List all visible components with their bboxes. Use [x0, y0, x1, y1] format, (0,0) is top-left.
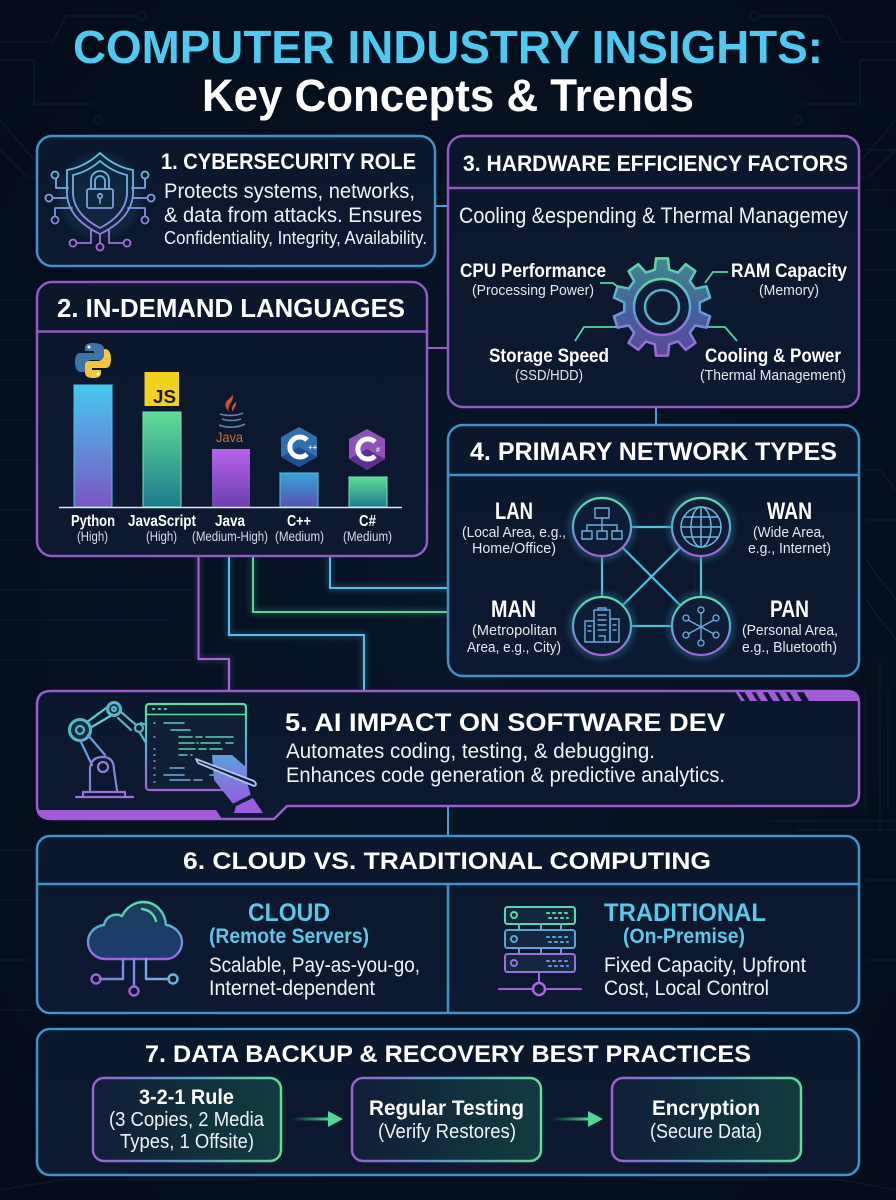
title [73, 21, 823, 121]
icon: python logo [75, 343, 111, 378]
step: encryption [612, 1078, 801, 1161]
traditional text: (On-Premise) [623, 925, 745, 948]
bar labels: (High) [77, 528, 108, 544]
title: Key Concepts & Trends [202, 70, 694, 121]
icon: cloud [88, 902, 182, 996]
label: lan [462, 498, 566, 557]
icon: java logo: Java [216, 429, 243, 445]
bar: Java [212, 449, 250, 507]
bar chart [59, 385, 402, 508]
accent: top-right stripes [735, 691, 859, 701]
icon: lan [568, 493, 636, 561]
icon: javascript logo [144, 372, 179, 407]
panel: 4. primary network types [448, 425, 859, 676]
bar: JavaScript [143, 412, 181, 507]
bar labels: Java [215, 513, 245, 530]
factor: ram capacity: RAM Capacity [731, 261, 847, 282]
description: Automates coding, testing, & debugging. [286, 740, 655, 763]
cloud text: (Remote Servers) [209, 925, 369, 948]
bar: C# [349, 477, 387, 507]
step: regular testing: Regular Testing [369, 1097, 524, 1120]
network diagram links [602, 527, 701, 626]
icon: java logo [216, 394, 245, 445]
label: pan [742, 596, 838, 656]
step: encryption: Encryption [652, 1097, 760, 1120]
heading: 2. IN-DEMAND LANGUAGES [57, 293, 405, 323]
icon: man buildings [568, 592, 636, 660]
factor: cpu performance: CPU Performance [460, 261, 606, 282]
bar labels: (Medium) [343, 528, 392, 544]
cloud text: CLOUD [248, 899, 330, 927]
label: man: MAN [491, 596, 536, 623]
step: encryption: (Secure Data) [650, 1121, 762, 1143]
icon: pan star network [667, 592, 735, 660]
factor: cpu performance: (Processing Power) [472, 282, 594, 299]
icon: c# logo [349, 429, 385, 470]
panel: 1. cybersecurity role [37, 136, 435, 266]
step: 3-2-1 rule [93, 1078, 281, 1161]
heading: 1. CYBERSECURITY ROLE [161, 149, 416, 174]
step: regular testing: (Verify Restores) [378, 1121, 516, 1143]
heading: 6. CLOUD VS. TRADITIONAL COMPUTING [183, 848, 711, 875]
bar labels: C++ [287, 513, 311, 530]
icon: code window with hand [146, 704, 263, 813]
label: lan: (Local Area, e.g., [462, 524, 566, 541]
factor: ram capacity [731, 261, 847, 299]
label: wan [748, 498, 831, 557]
description [286, 740, 725, 787]
step: 3-2-1 rule: Types, 1 Offsite) [120, 1131, 254, 1153]
factor: storage speed: (SSD/HDD) [515, 367, 583, 384]
icon: gear [614, 258, 710, 356]
hand and sleeve [212, 755, 251, 805]
label: man: Area, e.g., City) [467, 639, 561, 656]
heading: 5. AI IMPACT ON SOFTWARE DEV [285, 709, 725, 737]
factor: ram capacity: (Memory) [759, 282, 819, 299]
label: wan: e.g., Internet) [748, 540, 831, 557]
bar labels [71, 513, 392, 544]
gear callout lines [575, 272, 737, 341]
traditional text [604, 899, 806, 1000]
bar labels: (Medium) [275, 528, 324, 544]
arrow [291, 1111, 343, 1127]
icon: shield with padlock and circuits [46, 153, 154, 250]
panel: 6. cloud vs traditional computing [37, 836, 859, 1013]
icon: wan globe [667, 493, 735, 561]
connector traces between panels [198, 206, 656, 836]
bar labels: Python [71, 513, 115, 530]
icon: c++ logo [281, 427, 318, 467]
bar labels: JavaScript [128, 513, 196, 530]
panel: 2. in-demand languages [37, 282, 427, 556]
heading: 4. PRIMARY NETWORK TYPES [470, 438, 837, 466]
subheading: Cooling &espending & Thermal Managemey [459, 203, 848, 228]
icon: server rack [499, 907, 581, 995]
icon: c++ logo: ++ [308, 443, 318, 452]
description: & data from attacks. Ensures [164, 204, 422, 227]
panel: 3. hardware efficiency factors [448, 136, 859, 407]
title: COMPUTER INDUSTRY INSIGHTS: [73, 21, 823, 73]
icon: javascript logo: JS [153, 387, 176, 407]
factor: cooling and power: Cooling & Power [705, 346, 842, 367]
step: 3-2-1 rule: (3 Copies, 2 Media [109, 1109, 265, 1131]
step: regular testing [352, 1078, 541, 1161]
factor: storage speed [489, 346, 609, 384]
panel: 7. data backup and recovery best practices [37, 1029, 859, 1175]
traditional text: Fixed Capacity, Upfront [604, 954, 806, 977]
heading: 3. HARDWARE EFFICIENCY FACTORS [463, 151, 848, 176]
label: pan: e.g., Bluetooth) [742, 639, 837, 656]
label: wan: WAN [767, 498, 812, 525]
cloud text: Scalable, Pay-as-you-go, [209, 954, 420, 977]
bar labels: (Medium-High) [192, 528, 268, 544]
factor: cpu performance [460, 261, 606, 299]
icon: robot arm [70, 702, 158, 797]
heading: 7. DATA BACKUP & RECOVERY BEST PRACTICES [145, 1041, 751, 1068]
label: wan: (Wide Area, [753, 524, 825, 541]
description: Confidentiality, Integrity, Availability. [164, 228, 427, 248]
cloud text [209, 899, 420, 1000]
step: 3-2-1 rule: 3-2-1 Rule [139, 1086, 234, 1109]
label: pan: (Personal Area, [742, 622, 838, 639]
traditional text: TRADITIONAL [604, 899, 766, 927]
traditional text: Cost, Local Control [604, 977, 769, 1000]
label: man: (Metropolitan [472, 622, 557, 639]
arrow [551, 1111, 603, 1127]
accent: bottom-left bar [38, 810, 222, 819]
label: lan: Home/Office) [472, 540, 556, 557]
description [164, 180, 427, 248]
factor: cooling and power: (Thermal Management) [700, 367, 846, 384]
bar labels: C# [359, 513, 376, 530]
description: Enhances code generation & predictive analytics. [286, 764, 725, 787]
bar: Python [74, 385, 112, 507]
factor: storage speed: Storage Speed [489, 346, 609, 367]
bar labels: (High) [146, 528, 177, 544]
icon: c# logo: # [376, 447, 380, 454]
label: lan: LAN [495, 498, 533, 525]
label: pan: PAN [770, 596, 809, 623]
cloud text: Internet-dependent [209, 977, 375, 1000]
panel: 5. ai impact on software dev [37, 691, 859, 819]
factor: cooling and power [700, 346, 846, 384]
bar: C++ [280, 473, 318, 507]
label: man [467, 596, 561, 656]
description: Protects systems, networks, [164, 180, 415, 203]
